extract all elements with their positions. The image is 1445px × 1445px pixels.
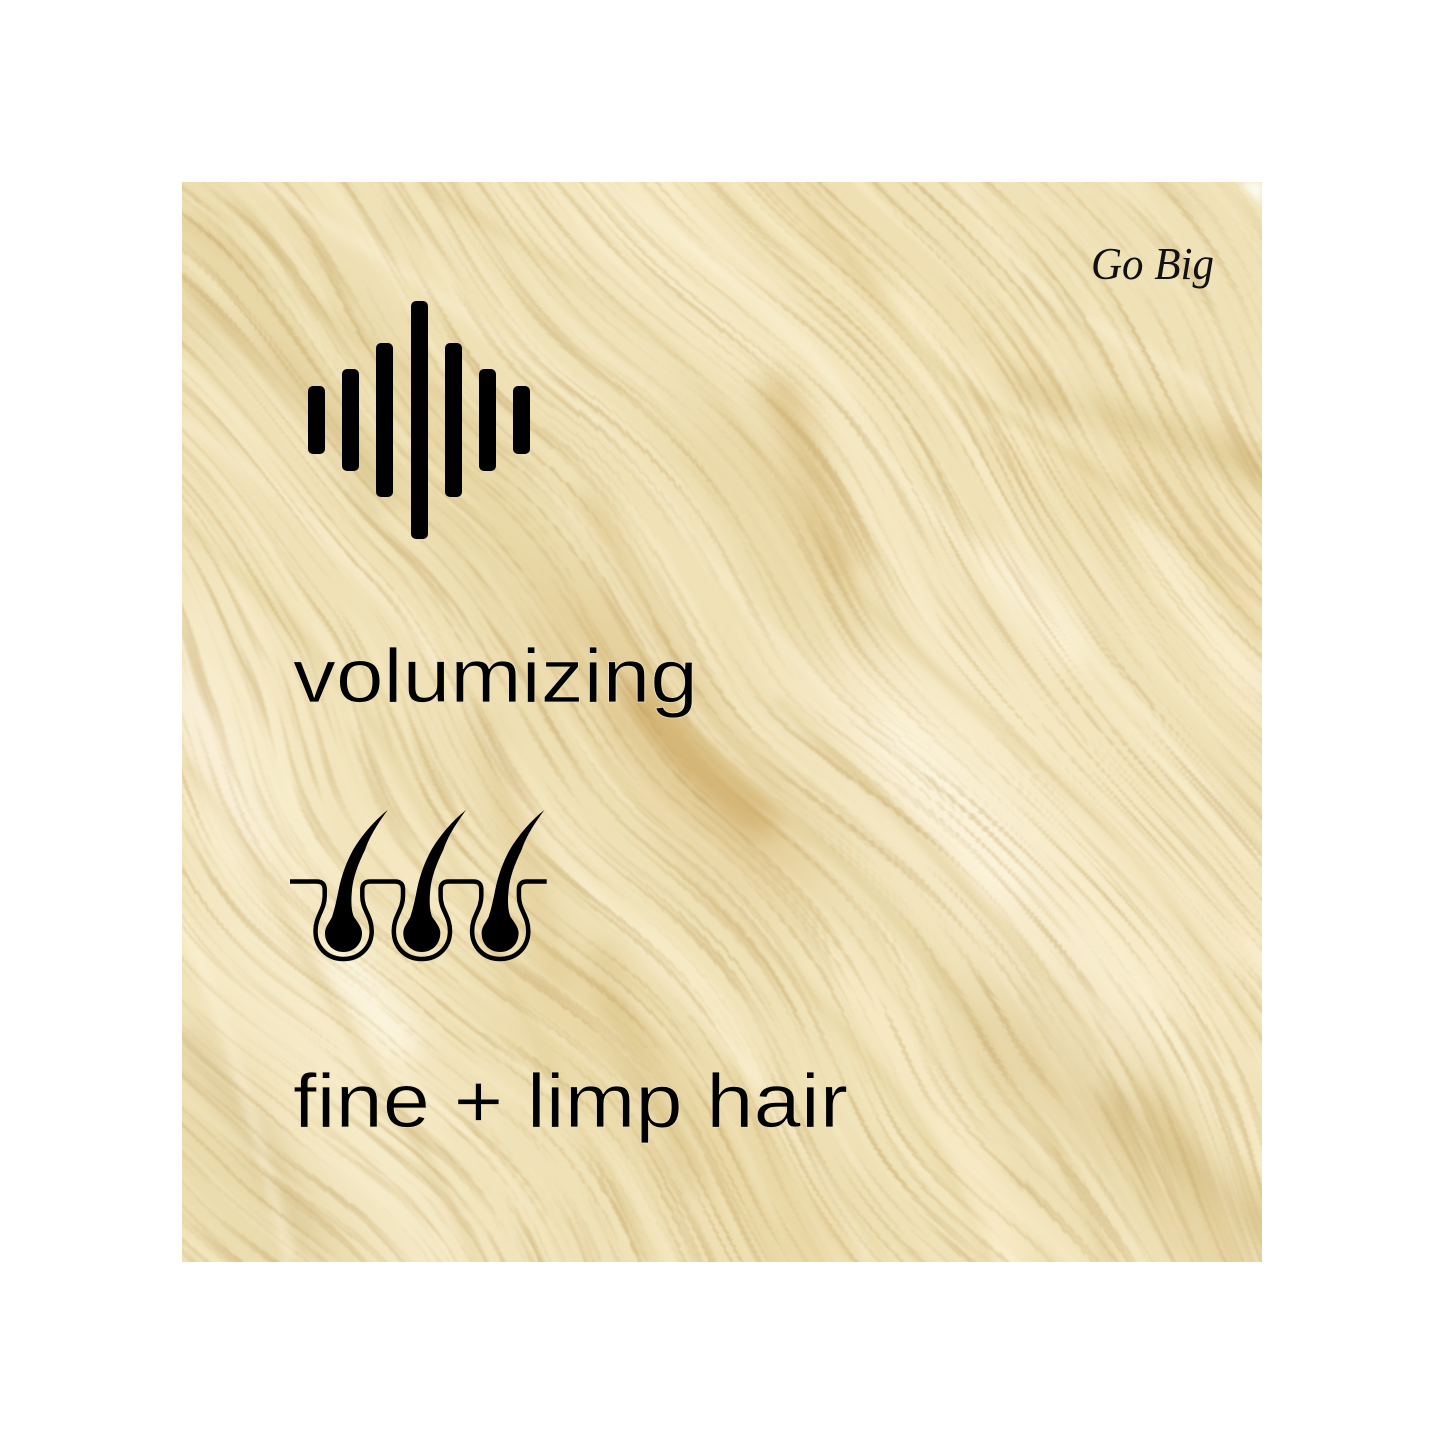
brand tagline: Go Big: Go Big: [1091, 238, 1214, 289]
infographic canvas: [182, 182, 1262, 1262]
heading: fine + limp hair: fine + limp hair: [293, 1059, 848, 1144]
panel: blonde hair photo background: [182, 182, 1262, 1262]
heading: volumizing: volumizing: [293, 634, 698, 719]
icon: sound wave volume bars: [308, 301, 530, 539]
icon: three hair follicles: [290, 810, 547, 959]
